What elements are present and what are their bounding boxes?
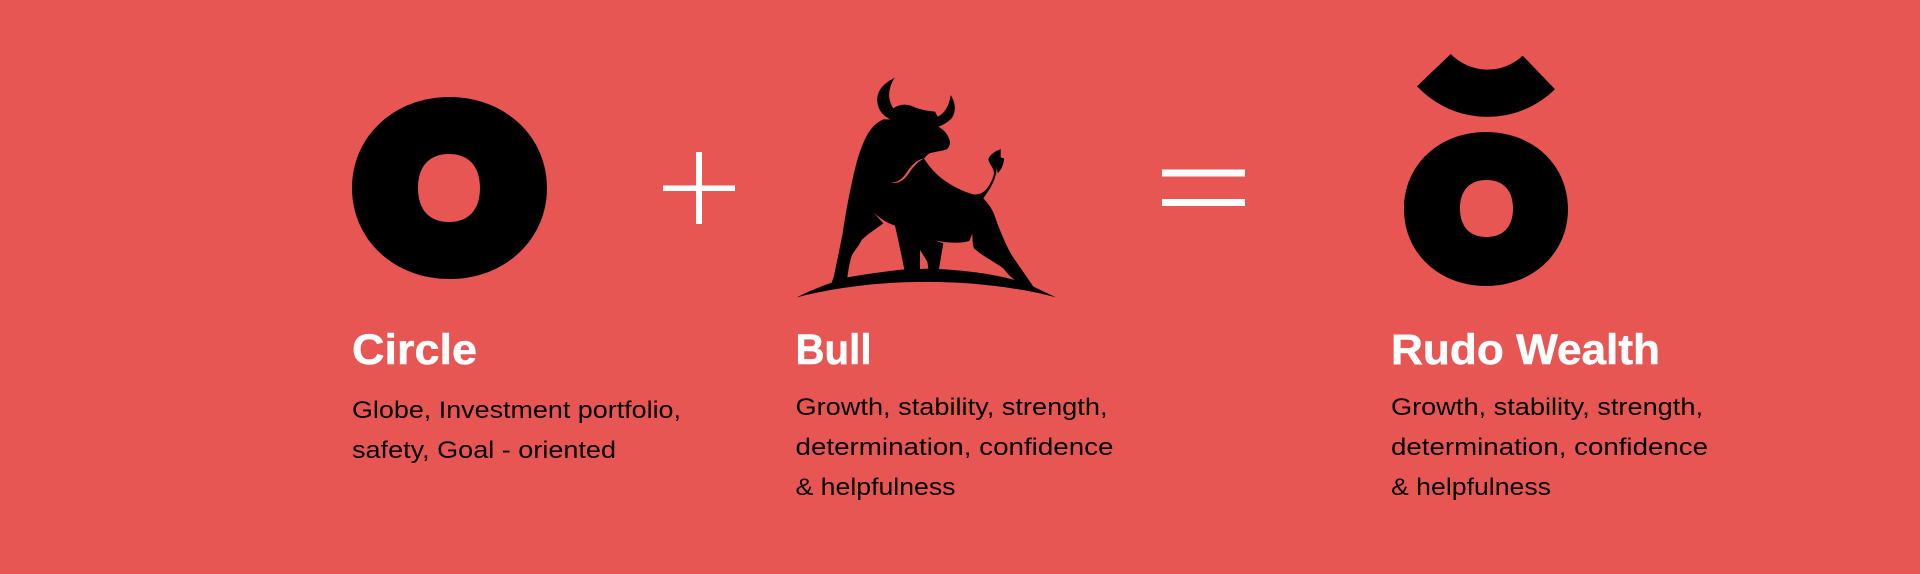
- text block: circle meanings: [352, 397, 681, 464]
- text block: Rudo Wealth meanings: Growth, stability, strength,: [1391, 394, 1703, 421]
- panel: Rudo Wealth: [1391, 54, 1708, 501]
- panel: circle: [352, 97, 681, 464]
- text block: circle meanings: safety, Goal - oriented: [352, 437, 616, 464]
- icon: plus sign: [663, 152, 735, 224]
- icon: circle ring: [352, 97, 547, 279]
- text block: bull meanings: & helpfulness: [796, 474, 956, 501]
- text block: circle meanings: Globe, Investment portfolio,: [352, 397, 681, 424]
- text block: bull meanings: determination, confidence: [796, 434, 1114, 461]
- text block: Rudo Wealth meanings: & helpfulness: [1391, 474, 1551, 501]
- text block: bull meanings: Growth, stability, strength,: [796, 394, 1108, 421]
- logo ring: [1404, 132, 1568, 286]
- text block: Rudo Wealth meanings: determination, confidence: [1391, 434, 1708, 461]
- panel: bull: [796, 78, 1114, 501]
- icon: Rudo Wealth logo: [1404, 54, 1568, 286]
- icon: equals sign: [1162, 170, 1245, 206]
- text block: Rudo Wealth meanings: [1391, 394, 1708, 501]
- heading: Circle: Circle: [352, 326, 477, 374]
- heading: Bull: Bull: [796, 326, 872, 374]
- text block: bull meanings: [796, 394, 1114, 501]
- heading: Rudo Wealth: Rudo Wealth: [1391, 326, 1660, 374]
- icon: bull on hill: [797, 78, 1056, 297]
- logo arc: [1417, 54, 1555, 117]
